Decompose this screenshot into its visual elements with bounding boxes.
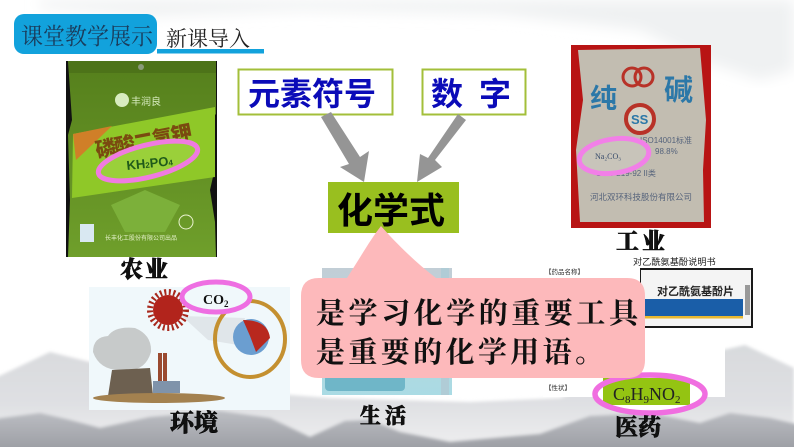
formula badge with highlight: NO: [649, 384, 675, 404]
header: section tab: 课堂教学展示: [21, 24, 154, 49]
image: soda ash bag: 纯: [590, 84, 617, 114]
box: element symbols: 元素符号: [248, 76, 376, 112]
box: numbers: 数 字: [431, 76, 511, 112]
formula badge with highlight: 2: [675, 394, 681, 406]
image: daily product: [322, 268, 452, 395]
image: soda ash bag: 河北双环科技股份有限公司: [590, 192, 692, 202]
dashed light rays: [182, 316, 245, 345]
label: industry: 工业: [616, 229, 665, 254]
CO2 highlight ellipse: [182, 282, 250, 312]
image: fertilizer bag: KH2PO4: [126, 153, 174, 173]
formula badge with highlight: C: [613, 384, 625, 404]
callout: [301, 226, 645, 378]
image: medicine sheet: 对乙酰氨基酚说明书: [633, 256, 716, 267]
callout: 是学习化学的重要工具: [316, 297, 642, 330]
label: daily life: 生活: [360, 404, 406, 428]
image: soda ash bag: SN/T 219-92 II类: [596, 168, 656, 178]
label: agriculture: 农业: [119, 257, 168, 282]
image: medicine sheet: 【性状】: [545, 383, 571, 392]
formula badge with highlight: 9: [644, 394, 650, 406]
image: soda ash bag: Na₂CO₃: [595, 152, 621, 161]
callout: 是重要的化学用语。: [316, 336, 604, 369]
header: section tab: [14, 14, 264, 54]
arrow: left: [321, 112, 369, 182]
image: medicine sheet: [543, 256, 753, 397]
image: fertilizer bag: 磷酸二氢钾: [93, 121, 194, 163]
box: chemical formula: 化学式: [337, 190, 445, 231]
image: fertilizer bag: 长丰化工股份有限公司出品: [105, 234, 177, 242]
CO2 highlight ellipse: 2: [224, 299, 229, 309]
power plant: [93, 353, 225, 403]
label: environment: 环境: [170, 409, 218, 437]
ring and earth: [215, 301, 285, 377]
label: medicine: 医药: [615, 415, 661, 440]
formula badge with highlight: H: [631, 384, 644, 404]
box: numbers: [422, 70, 526, 114]
formula badge with highlight: 8: [625, 394, 631, 406]
arrow: right: [417, 114, 466, 182]
box: chemical formula: [328, 182, 459, 233]
image: medicine sheet: 对乙酰氨基酚片: [657, 284, 734, 298]
CO2 highlight ellipse: CO: [203, 293, 224, 308]
image: soda ash bag: [571, 45, 711, 228]
image: climate scene: [89, 287, 290, 410]
sun: [150, 292, 186, 328]
image: soda ash bag: 碱: [664, 74, 693, 107]
formula badge with highlight: [595, 375, 705, 413]
box: element symbols: [238, 70, 392, 114]
image: fertilizer bag: 丰润良: [131, 95, 161, 108]
smoke: [93, 328, 151, 370]
image: fertilizer bag: [66, 61, 217, 257]
image: medicine sheet: 【药品名称】: [545, 267, 584, 276]
image: soda ash bag: 98.8%: [655, 147, 678, 156]
image: soda ash bag: SS: [631, 112, 649, 127]
image: soda ash bag: ISO14001标准: [640, 135, 692, 145]
header: section tab: 新课导入: [166, 27, 250, 51]
